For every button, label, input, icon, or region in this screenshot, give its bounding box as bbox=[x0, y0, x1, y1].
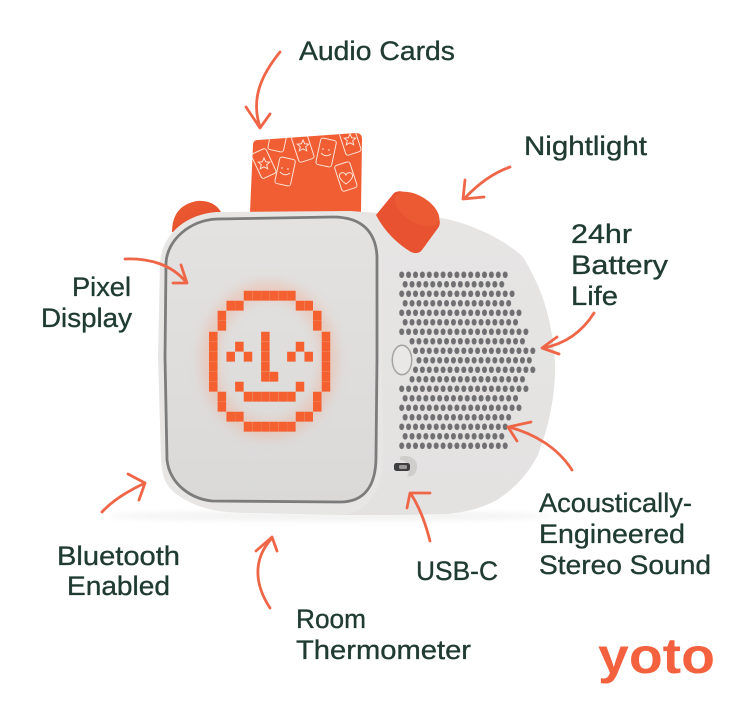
arrow: bluetooth bbox=[102, 474, 145, 512]
pixel face glow bbox=[209, 290, 329, 430]
left knob bbox=[172, 201, 222, 232]
label: audio cards: Audio Cards bbox=[299, 36, 455, 66]
label: pixel display bbox=[41, 272, 133, 333]
speaker grille bbox=[398, 270, 536, 450]
pixel smiley face bbox=[209, 291, 330, 431]
label: battery life: 24hr bbox=[571, 219, 632, 249]
label: battery life: Life bbox=[571, 281, 618, 311]
USB-C port bbox=[394, 456, 417, 477]
label: stereo sound: Acoustically- bbox=[539, 488, 692, 518]
label: stereo sound: Engineered bbox=[539, 519, 685, 549]
arrow: nightlight bbox=[463, 167, 510, 199]
device shadow bbox=[110, 511, 550, 521]
label: room thermometer: Thermometer bbox=[296, 635, 471, 665]
label: pixel display: Display bbox=[41, 303, 133, 333]
display screen bbox=[165, 217, 377, 502]
label: nightlight: Nightlight bbox=[524, 131, 648, 161]
label: room thermometer: Room bbox=[296, 604, 366, 634]
label: battery life bbox=[571, 219, 669, 311]
arrow: room thermometer bbox=[256, 537, 277, 608]
label: bluetooth enabled: Enabled bbox=[67, 571, 170, 601]
arrow: audio cards bbox=[246, 52, 280, 128]
label: battery life: Battery bbox=[571, 250, 669, 280]
arrow: battery bbox=[542, 313, 594, 354]
right knob bbox=[376, 185, 445, 253]
label: room thermometer bbox=[296, 604, 471, 665]
logo: yoto: yoto bbox=[598, 628, 715, 684]
front bezel bbox=[158, 211, 383, 515]
label: bluetooth enabled: Bluetooth bbox=[57, 541, 180, 571]
side button bbox=[392, 344, 412, 376]
label: USB-C: USB-C bbox=[416, 556, 498, 586]
label: bluetooth enabled bbox=[57, 541, 180, 601]
label: stereo sound: Stereo Sound bbox=[539, 550, 711, 580]
arrow: speaker bbox=[508, 422, 572, 470]
audio card bbox=[250, 133, 362, 212]
label: pixel display: Pixel bbox=[72, 272, 131, 302]
arrow: USB-C bbox=[407, 493, 430, 541]
arrow: pixel display bbox=[125, 259, 187, 283]
device body side bbox=[340, 211, 555, 515]
label: stereo sound bbox=[539, 488, 711, 580]
